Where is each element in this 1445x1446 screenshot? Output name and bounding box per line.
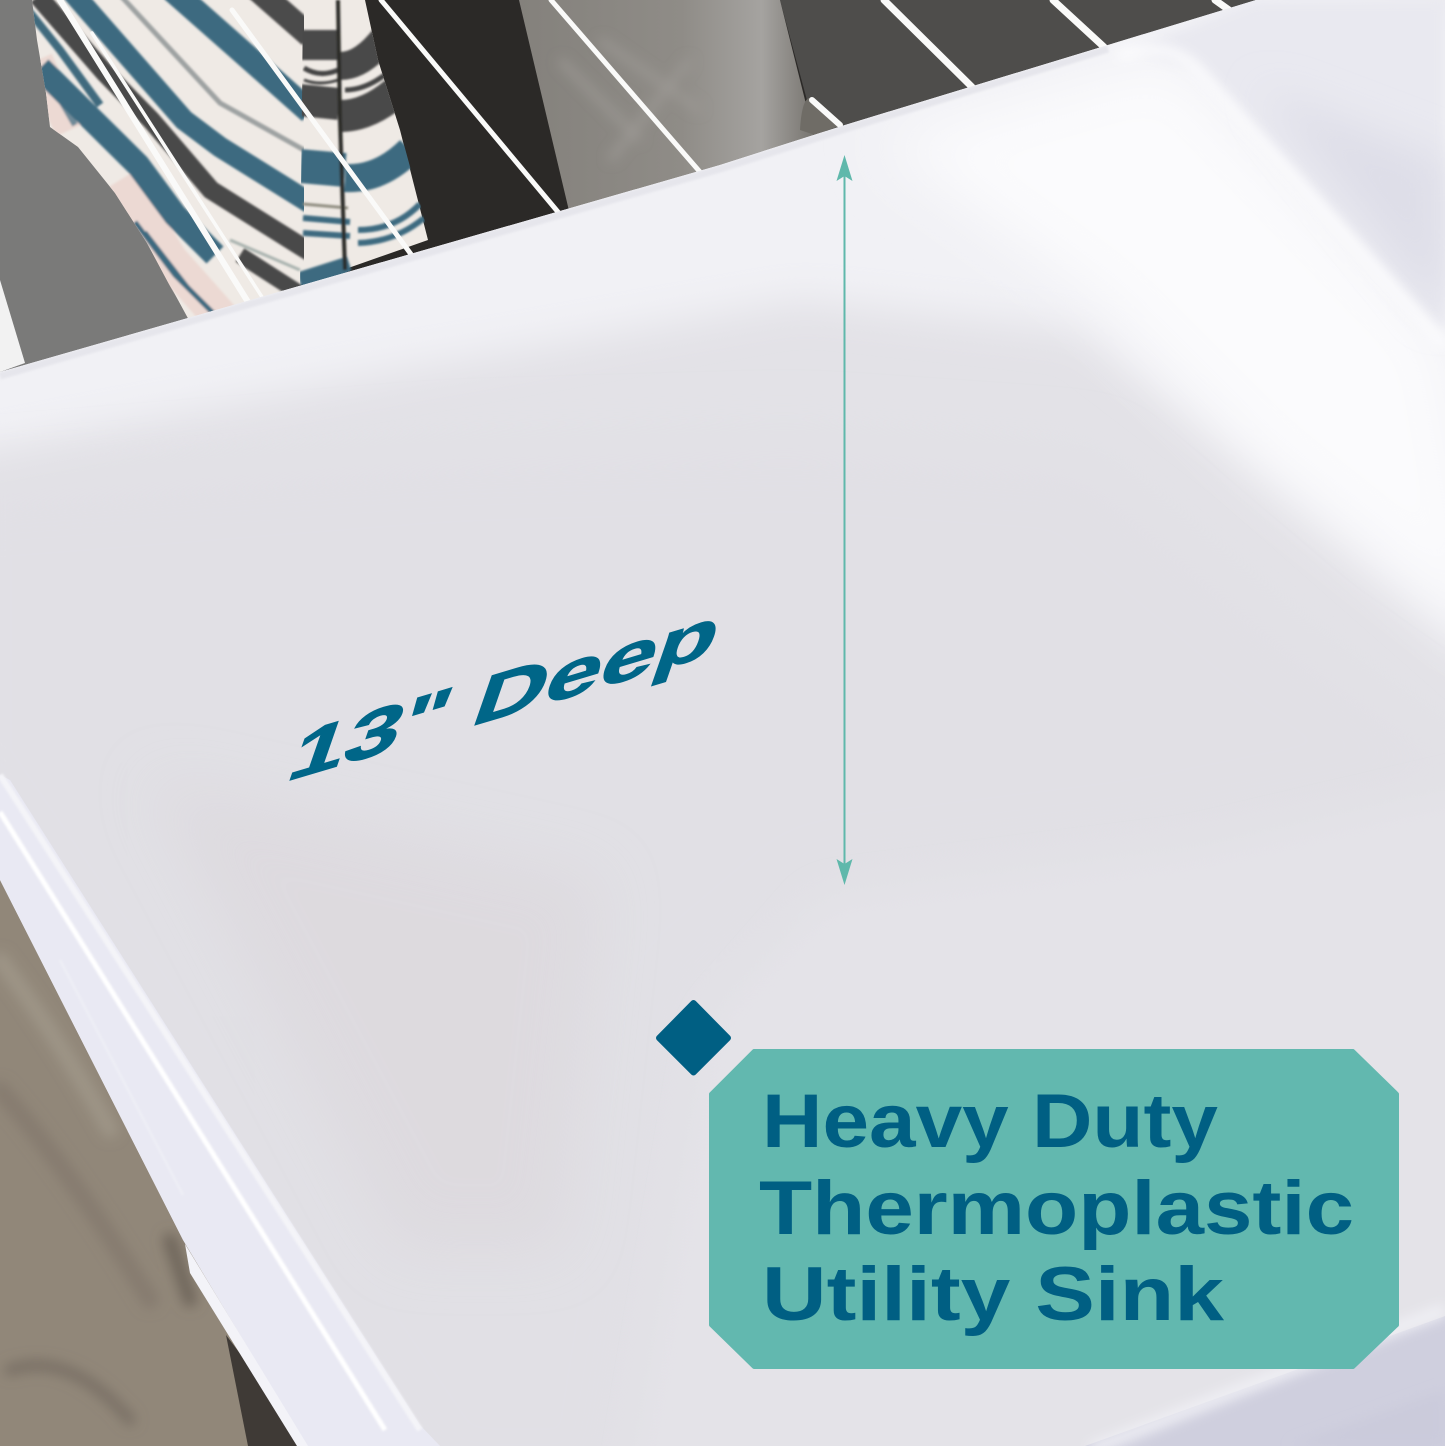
floor: [640, 790, 1445, 1446]
silver faucet edge: [1418, 0, 1445, 17]
lower right rim: [1085, 1310, 1445, 1446]
callout heading: Utility Sink: [762, 1252, 1225, 1337]
room background behind sink: [0, 0, 1445, 420]
callout heading: Heavy Duty: [762, 1079, 1218, 1164]
lit upper wall and rim: [0, 0, 1256, 445]
top right deck: [1174, 0, 1436, 312]
drying rack wires: [60, 0, 1229, 302]
white rack leg: [0, 280, 25, 372]
sink lower lip over floor: [185, 1244, 308, 1446]
callout panel: [711, 1051, 1397, 1367]
striped towel: [20, 0, 428, 330]
inner corner highlight: [1142, 46, 1418, 310]
label: 13" Deep: 13" Deep: [278, 591, 733, 798]
shaded back wall: [9, 898, 10, 899]
bright right side of basin: [968, 95, 1445, 570]
warm shadow on left wall: [150, 780, 600, 1250]
depth arrow: [836, 155, 852, 885]
left rim: [0, 775, 440, 1446]
icon: diamond marker: [659, 1003, 728, 1072]
callout background: [711, 1051, 1397, 1367]
rim lip: [0, 49, 1108, 376]
wood floor: [0, 860, 320, 1446]
callout heading: Thermoplastic: [759, 1166, 1354, 1251]
